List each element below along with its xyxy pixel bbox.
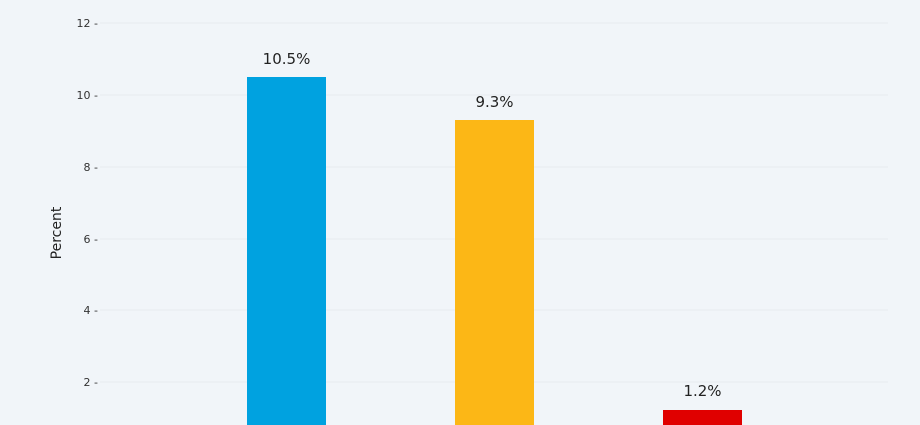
bar: red 1.2% [663,382,742,425]
y axis ticks [77,17,98,389]
y axis ticks: 10 - [77,89,98,102]
y axis ticks: 12 - [77,17,98,30]
bar: red 1.2%: 1.2% [683,382,722,400]
bar: blue 10.5% [247,50,326,425]
bar: yellow 9.3%: 9.3% [475,93,514,111]
bar: yellow 9.3% [455,93,534,425]
y axis ticks: 2 - [84,376,98,389]
y axis ticks: 8 - [84,161,98,174]
y axis ticks: 6 - [84,233,98,246]
bar: blue 10.5%: 10.5% [263,50,310,68]
y axis ticks: 4 - [84,304,98,317]
y axis label: Percent [49,206,65,259]
